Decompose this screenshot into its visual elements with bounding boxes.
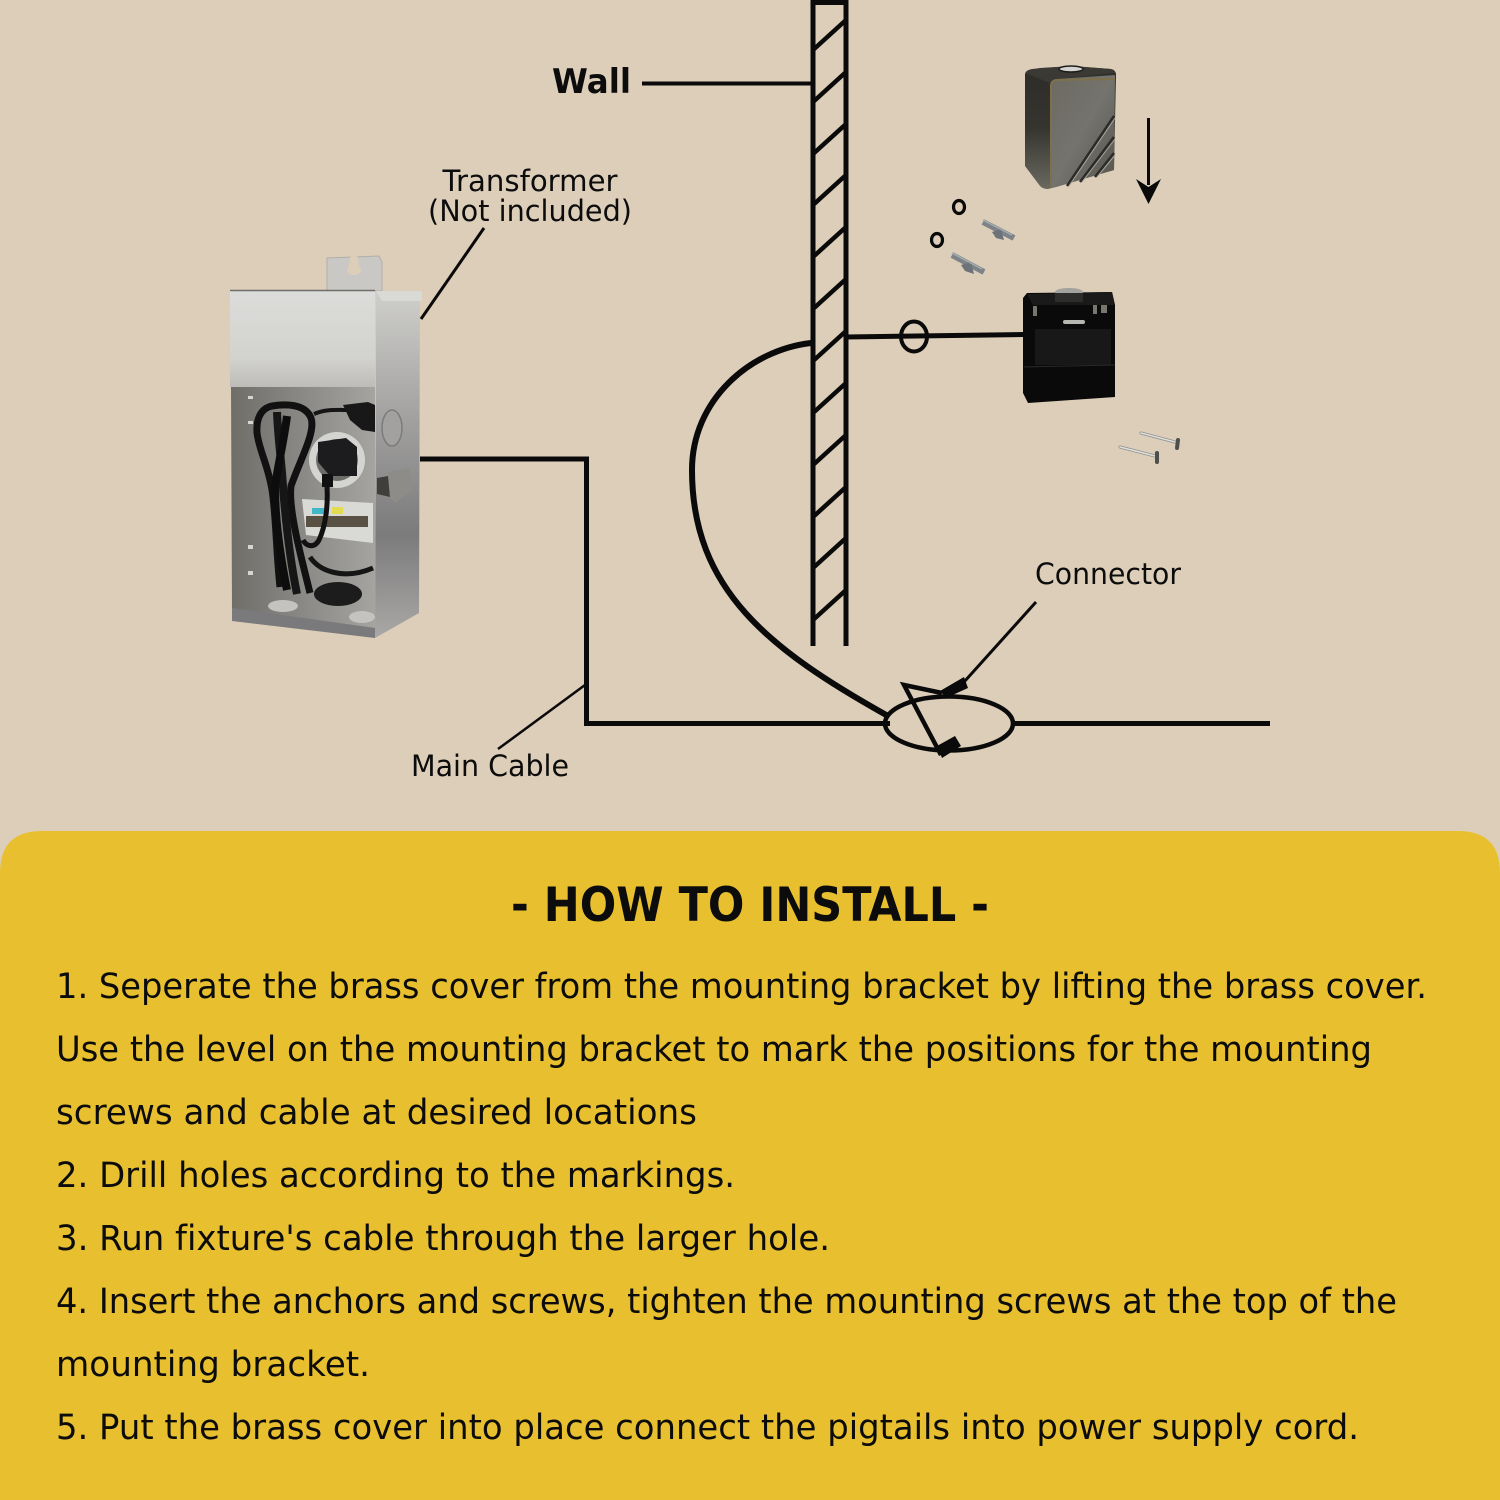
knockout ring bbox=[309, 432, 365, 488]
transformer label bbox=[428, 164, 632, 228]
instructions: mounting bracket. bbox=[56, 1345, 370, 1385]
heading: - HOW TO INSTALL - bbox=[511, 878, 989, 933]
instructions: 3. Run fixture's cable through the larger hole. bbox=[56, 1219, 830, 1259]
main cable bbox=[420, 459, 1270, 724]
knockouts bottom bbox=[314, 582, 362, 606]
connector leader line bbox=[964, 602, 1036, 682]
hatched wall bbox=[813, 2, 846, 646]
icon: transformer box bbox=[230, 255, 422, 638]
power cord coil bbox=[257, 405, 312, 593]
terminal block bbox=[302, 499, 373, 543]
cable grommet bbox=[901, 322, 927, 352]
instructions: 5. Put the brass cover into place connect the pigtails into power supply cord. bbox=[56, 1408, 1359, 1448]
top plug bbox=[343, 402, 375, 432]
wall diagram bbox=[552, 2, 846, 646]
cable to bracket bbox=[846, 334, 1024, 337]
icon: brass cover bbox=[1025, 66, 1116, 189]
transformer label: (Not included) bbox=[428, 194, 632, 228]
icon: mounting bracket bbox=[1023, 288, 1115, 403]
instructions: 2. Drill holes according to the markings. bbox=[56, 1156, 735, 1196]
icon: screws bbox=[1120, 433, 1178, 462]
instructions: Use the level on the mounting bracket to mark the positions for the mounting bbox=[56, 1030, 1372, 1070]
transformer label: Transformer bbox=[442, 164, 618, 198]
main cable label: Main Cable bbox=[411, 749, 569, 783]
ring plug bbox=[318, 438, 357, 476]
fixture cable bbox=[692, 343, 888, 716]
panel: how to install bbox=[0, 831, 1500, 1500]
connector symbol bbox=[885, 677, 1013, 758]
arrow: down bbox=[1136, 118, 1161, 204]
main cable leader line bbox=[498, 685, 585, 749]
wall label: Wall bbox=[552, 62, 631, 102]
transformer leader line bbox=[421, 228, 484, 319]
instructions: 4. Insert the anchors and screws, tighten the mounting screws at the top of the bbox=[56, 1282, 1397, 1322]
icon: washers and anchors bbox=[932, 200, 1014, 274]
side knockout and clamp bbox=[382, 410, 402, 446]
plug cord bbox=[303, 487, 327, 546]
instructions bbox=[56, 967, 1427, 1448]
instructions: 1. Seperate the brass cover from the mounting bracket by lifting the brass cover. bbox=[56, 967, 1427, 1007]
mounting screws bbox=[248, 396, 253, 575]
connector label: Connector bbox=[1035, 557, 1182, 591]
instructions: screws and cable at desired locations bbox=[56, 1093, 697, 1133]
wall leader line bbox=[642, 82, 813, 86]
